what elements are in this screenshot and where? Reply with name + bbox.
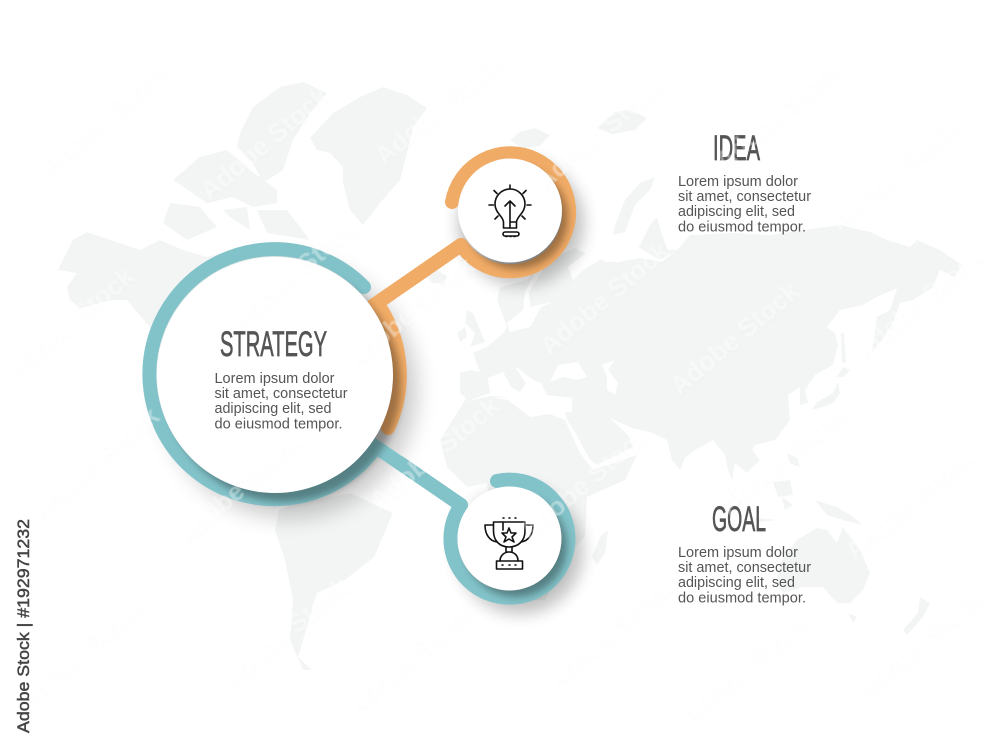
strategy body text: adipiscing elit, sed: [214, 401, 332, 417]
watermark pattern: Adobe Stock: [24, 400, 165, 526]
sea: Mediterranean: [468, 366, 572, 415]
strategy orange arc: [377, 245, 461, 428]
watermark pattern: Adobe Stock: [9, 590, 150, 716]
watermark pattern: Adobe Stock: [339, 250, 480, 376]
watermark pattern: Adobe Stock: [849, 580, 990, 706]
sea: White Sea inlets: [568, 240, 677, 280]
sea: Baltic: [507, 270, 553, 332]
watermark pattern: Adobe Stock: [514, 420, 655, 546]
strategy body text: [214, 371, 348, 432]
shadow: idea circle: [458, 160, 584, 286]
icon: light bulb with arrow: [489, 185, 531, 236]
strategy text block: [214, 325, 348, 432]
map: Newfoundland: [427, 270, 447, 284]
sea: Caspian: [602, 360, 618, 395]
watermark pattern: Adobe Stock: [839, 440, 980, 566]
watermark pattern: Adobe Stock: [339, 595, 480, 721]
watermark pattern: Adobe Stock: [674, 605, 815, 731]
shadow: big circle: [161, 262, 417, 518]
goal body text: do eiusmod tempor.: [678, 590, 806, 606]
idea text block: [678, 129, 811, 236]
watermark pattern: Adobe Stock: [214, 570, 355, 696]
shadow: goal circle: [457, 488, 583, 614]
sea: Black Sea: [550, 362, 587, 382]
strategy teal arc: [149, 249, 461, 505]
idea body text: do eiusmod tempor.: [678, 220, 806, 236]
heading: idea: IDEA: [713, 129, 760, 168]
map: North America: [58, 232, 350, 500]
watermark pattern: Adobe Stock: [824, 110, 965, 236]
goal body text: Lorem ipsum dolor: [678, 545, 798, 561]
vertical stock credit: Adobe Stock | #192971232: [14, 519, 33, 733]
idea body text: [678, 174, 811, 236]
map: Greenland: [310, 87, 427, 225]
map: Eurasia: [460, 217, 962, 480]
watermark pattern: Adobe Stock: [224, 210, 365, 336]
ring shade: big circle: [167, 268, 401, 502]
watermark pattern: Adobe Stock: [529, 70, 670, 196]
idea body text: sit amet, consectetur: [678, 189, 811, 205]
strategy body text: Lorem ipsum dolor: [214, 371, 335, 387]
watermark pattern: Adobe Stock: [714, 395, 855, 521]
watermark pattern: Adobe Stock: [369, 45, 510, 171]
world map background: [58, 82, 962, 670]
shaded edge on rings: [167, 167, 568, 597]
map: Africa: [440, 397, 637, 600]
icon: trophy with star: [485, 518, 533, 569]
watermark pattern: Adobe Stock: [194, 80, 335, 206]
watermark pattern: Adobe Stock: [169, 425, 310, 551]
map: Canadian Arctic islands: [163, 82, 327, 240]
watermark pattern: Adobe Stock: [0, 260, 140, 386]
watermark pattern: Adobe Stock: [534, 235, 675, 361]
map seas cut-outs: [468, 240, 677, 415]
watermark pattern: Adobe Stock: [34, 55, 175, 181]
map: Madagascar: [592, 530, 608, 565]
idea body text: Lorem ipsum dolor: [678, 174, 798, 190]
map: Iceland and Svalbard: [510, 110, 647, 148]
goal ring arc: [400, 463, 568, 598]
goal white circle: [458, 486, 562, 590]
ring shade: idea circle: [466, 167, 568, 269]
goal body text: adipiscing elit, sed: [678, 575, 795, 591]
strategy body text: do eiusmod tempor.: [214, 416, 342, 432]
map: Indonesia and Philippines: [723, 453, 862, 525]
map: Tasmania and New Zealand: [848, 597, 930, 635]
watermark pattern: Adobe Stock: [849, 240, 990, 366]
goal text block: [678, 500, 811, 606]
goal body text: sit amet, consectetur: [678, 560, 811, 576]
watermark pattern: Adobe Stock: [664, 275, 805, 401]
map: South America: [275, 493, 393, 670]
map: Australia: [777, 527, 870, 603]
watermark pattern: Adobe Stock: [364, 390, 505, 516]
soft drop shadows beneath circles: [161, 160, 584, 614]
teal connector ring: strategy to goal: [149, 249, 568, 598]
watermark pattern: Adobe Stock: [539, 570, 680, 696]
idea ring arc: [380, 153, 569, 301]
goal body text: [678, 545, 811, 606]
strategy body text: sit amet, consectetur: [214, 386, 348, 402]
map: Japan and Sakhalin: [812, 333, 850, 410]
heading: strategy: STRATEGY: [220, 325, 327, 364]
map: British Isles: [457, 310, 485, 347]
idea white circle: [458, 158, 562, 262]
idea body text: adipiscing elit, sed: [678, 204, 795, 220]
watermark pattern: Adobe Stock: [709, 50, 850, 176]
heading: goal: GOAL: [712, 500, 766, 539]
ring shade: goal circle: [465, 495, 567, 597]
big white circle: [157, 257, 393, 493]
orange connector ring: strategy to idea: [377, 153, 569, 428]
map: Novaya Zemlya: [613, 177, 655, 235]
